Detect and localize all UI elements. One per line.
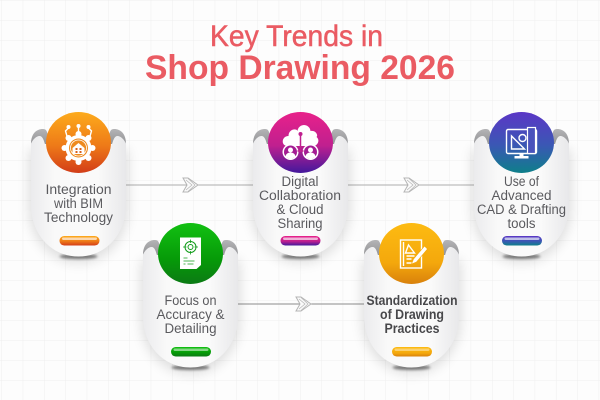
icon: document with target: [180, 238, 201, 269]
badge circle: [379, 223, 444, 284]
label: Integration: [46, 182, 112, 197]
accent pill: [171, 347, 211, 356]
label: Sharing: [278, 216, 322, 231]
label: Advanced: [492, 188, 552, 203]
label: Accuracy &: [156, 307, 224, 322]
badge circle: [158, 223, 223, 284]
arrow connector: accuracy to standardization: [237, 297, 365, 311]
label: & Cloud: [276, 202, 324, 217]
accent pill: [392, 347, 432, 356]
label: CAD & Drafting: [477, 202, 566, 217]
card: Digital Collaboration & Cloud Sharing: [251, 112, 350, 263]
label: with BIM: [53, 196, 103, 211]
label: [477, 174, 566, 231]
card: Integration with BIM Technology: [29, 112, 128, 263]
accent pill: [280, 236, 320, 246]
label: Collaboration: [259, 188, 341, 203]
label: tools: [508, 216, 536, 231]
badge circle: [46, 112, 111, 173]
icon: notepad with pencil: [400, 240, 428, 268]
card: Standardization of Drawing Practices: [362, 223, 461, 374]
label: Detailing: [164, 321, 216, 336]
label: [156, 293, 224, 336]
label: Digital: [282, 174, 318, 189]
label: Use of: [504, 174, 539, 189]
title line 1: Key Trends in: [210, 20, 383, 53]
icon: gear with house: [62, 124, 96, 165]
label: [259, 174, 341, 231]
label: Technology: [44, 210, 113, 225]
card: Focus on Accuracy & Detailing: [141, 223, 240, 374]
label: [44, 182, 113, 225]
icon: monitor with drafting tools: [506, 128, 536, 158]
label: [366, 293, 458, 336]
icon: cloud with two users: [282, 125, 318, 160]
card: Use of Advanced CAD & Drafting tools: [472, 112, 571, 263]
arrow connector: collaboration to CAD: [347, 178, 475, 192]
label: Practices: [384, 321, 440, 336]
title: [145, 20, 455, 87]
title line 2: Shop Drawing 2026: [145, 49, 455, 87]
label: Focus on: [164, 293, 216, 308]
arrow connector: BIM to collaboration: [125, 178, 254, 192]
label: of Drawing: [380, 307, 444, 322]
label: Standardization: [366, 293, 458, 308]
badge circle: [268, 112, 333, 173]
badge circle: [489, 112, 554, 173]
accent pill: [502, 236, 542, 246]
accent pill: [60, 236, 100, 246]
